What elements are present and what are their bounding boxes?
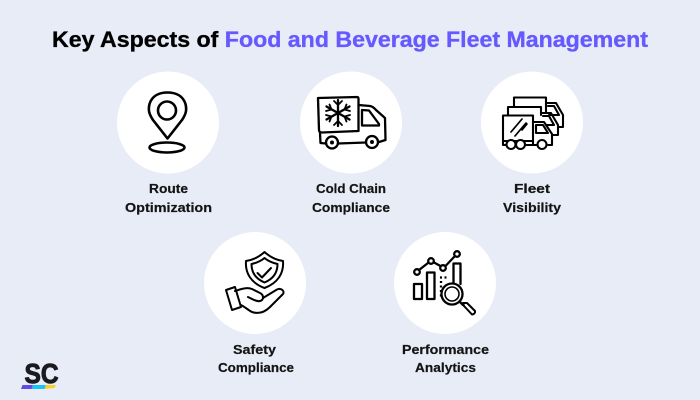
icon circle: safety <box>204 232 306 334</box>
label: performance analytics: Performance <box>402 343 489 357</box>
icon: refrigerated truck <box>318 97 386 148</box>
icon circle: fleet <box>481 72 583 174</box>
icon: hand with shield <box>226 252 284 313</box>
label: safety compliance: Safety <box>233 343 276 357</box>
panel: route optimization <box>117 72 219 215</box>
logo: SC: SC <box>24 358 58 389</box>
label: safety compliance <box>218 343 294 375</box>
panel: safety compliance <box>204 232 306 375</box>
icon circle: cold chain <box>300 72 402 174</box>
label: route optimization: Route <box>149 182 188 196</box>
icon: truck fleet <box>503 98 563 149</box>
panel: fleet visibility <box>481 72 583 215</box>
label: safety compliance: Compliance <box>218 361 294 375</box>
icon circle: route <box>117 72 219 174</box>
label: cold chain compliance <box>312 182 390 215</box>
label: route optimization <box>125 182 212 215</box>
panel: performance analytics <box>394 232 496 375</box>
icon circle: analytics <box>394 232 496 334</box>
label: fleet visibility <box>503 182 561 215</box>
label: performance analytics: Analytics <box>415 361 476 375</box>
label: cold chain compliance: Compliance <box>312 201 390 215</box>
label: fleet visibility: Fleet <box>514 182 551 196</box>
label: performance analytics <box>402 343 489 375</box>
title: Key Aspects of Food and Beverage Fleet Management <box>52 27 649 52</box>
panel: cold chain compliance <box>300 72 402 215</box>
label: cold chain compliance: Cold Chain <box>316 182 386 196</box>
icon: map pin <box>149 92 186 152</box>
icon: charts and magnifier <box>414 251 475 314</box>
label: route optimization: Optimization <box>125 201 212 215</box>
label: fleet visibility: Visibility <box>503 201 561 215</box>
